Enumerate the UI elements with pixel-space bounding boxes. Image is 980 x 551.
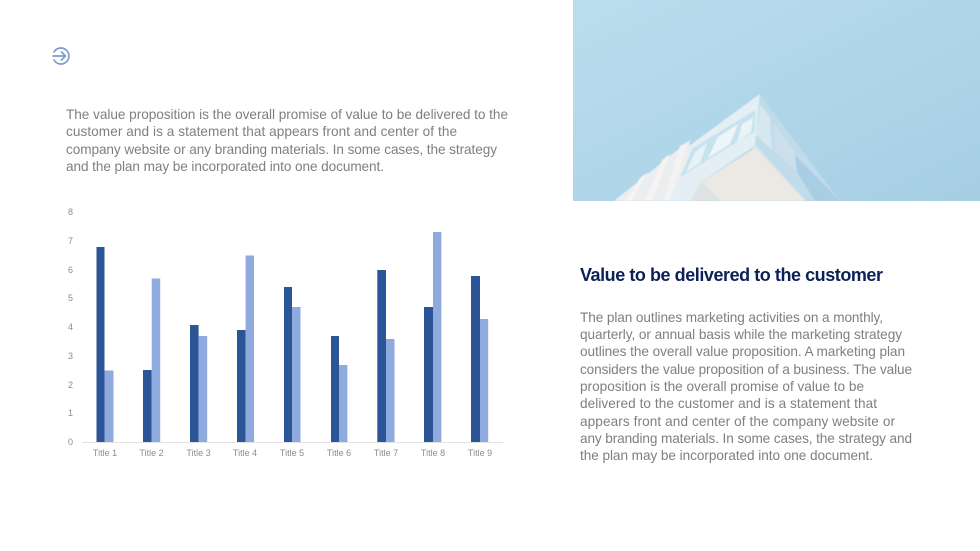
y axis labels: 3 — [68, 351, 73, 361]
body paragraph: proposition is the overall promise of value to be — [580, 379, 864, 394]
body paragraph: outlines the overall value proposition. A marketing plan — [580, 344, 905, 359]
y axis labels: 8 — [68, 207, 73, 217]
body paragraph — [580, 310, 912, 463]
body paragraph: appears front and center of the company website or — [580, 414, 895, 429]
y axis labels: 0 — [68, 437, 73, 447]
y axis labels: 1 — [68, 408, 73, 418]
x axis line — [82, 442, 503, 443]
photo: building against blue sky — [573, 0, 980, 201]
x axis labels: Title 9 — [468, 448, 492, 458]
body paragraph: The plan outlines marketing activities on a monthly, — [580, 310, 883, 325]
bars: series 1 — [96, 247, 480, 442]
icon: arrow in circle — [53, 48, 69, 64]
bars: series 2 — [104, 232, 488, 442]
body paragraph: the plan may be incorporated into one document. — [580, 448, 873, 463]
x axis labels — [93, 448, 492, 458]
x axis labels: Title 6 — [327, 448, 351, 458]
x axis labels: Title 8 — [421, 448, 445, 458]
y axis labels: 5 — [68, 293, 73, 303]
x axis labels: Title 3 — [186, 448, 211, 458]
x axis labels: Title 2 — [139, 448, 164, 458]
body paragraph: quarterly, or annual basis while the marketing strategy — [580, 327, 902, 342]
x axis labels: Title 5 — [280, 448, 304, 458]
intro paragraph: company website or any branding materials. In some cases, the strategy — [66, 142, 497, 157]
body paragraph: any branding materials. In some cases, the strategy and — [580, 431, 912, 446]
intro paragraph — [66, 107, 508, 174]
x axis labels: Title 4 — [233, 448, 257, 458]
body paragraph: delivered to the customer and is a statement that — [580, 396, 877, 411]
x axis labels: Title 7 — [374, 448, 398, 458]
intro paragraph: and the plan may be incorporated into one document. — [66, 159, 384, 174]
body paragraph: considers the value proposition of a business. The value — [580, 362, 912, 377]
y axis labels: 4 — [68, 322, 73, 332]
heading: Value to be delivered to the customer — [580, 265, 883, 285]
bar chart — [68, 207, 503, 458]
intro paragraph: customer and is a statement that appears front and center of the — [66, 124, 457, 139]
y axis labels — [68, 207, 73, 447]
y axis labels: 7 — [68, 236, 73, 246]
y axis labels: 2 — [68, 380, 73, 390]
x axis labels: Title 1 — [93, 448, 117, 458]
y axis labels: 6 — [68, 265, 73, 275]
intro paragraph: The value proposition is the overall promise of value to be delivered to the — [66, 107, 508, 122]
